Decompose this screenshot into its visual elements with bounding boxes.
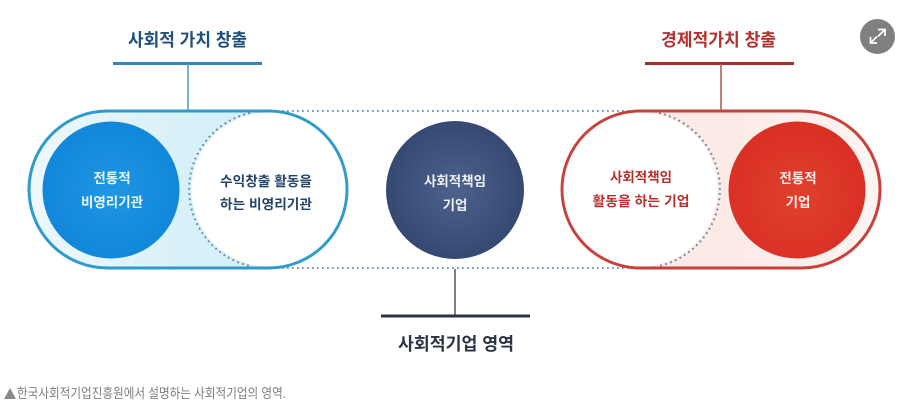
circle: traditional nonprofit — [42, 122, 180, 258]
label: traditional nonprofit: 비영리기관 — [81, 195, 144, 210]
dotted arc, right overlap — [659, 113, 720, 266]
icon: expand button — [860, 19, 895, 54]
circle: traditional company — [728, 122, 866, 258]
white overlap circle, left — [192, 112, 346, 266]
label: socially responsible company: 사회적책임 — [424, 174, 486, 189]
bracket: economic value — [645, 64, 794, 110]
label: traditional nonprofit: 전통적 — [93, 171, 131, 186]
bracket: social enterprise area — [381, 269, 530, 316]
bracket: social value — [113, 64, 262, 110]
label: traditional company: 기업 — [786, 195, 810, 210]
label: company with social responsibility activities: 사회적책임 — [610, 170, 672, 185]
heading: social enterprise area: 사회적기업 영역 — [398, 334, 514, 354]
label: socially responsible company: 기업 — [443, 198, 467, 213]
dotted connector lines of the social enterprise area — [272, 111, 640, 268]
label: revenue-generating nonprofit: 하는 비영리기관 — [220, 197, 313, 212]
panel: economic value pill — [562, 111, 880, 268]
label: revenue-generating nonprofit: 수익창출 활동을 — [220, 174, 312, 189]
panel: social value pill — [29, 111, 347, 268]
heading: economic value creation: 경제적가치 창출 — [661, 30, 776, 50]
icon: caption triangle — [4, 388, 16, 399]
circle: socially responsible company — [386, 121, 524, 259]
label: traditional company: 전통적 — [779, 171, 817, 186]
heading: social value creation: 사회적 가치 창출 — [128, 30, 247, 50]
caption: 한국사회적기업진흥원에서 설명하는 사회적기업의 영역. — [17, 386, 286, 401]
label: company with social responsibility activities: 활동을 하는 기업 — [592, 194, 690, 209]
white overlap circle, right — [564, 112, 718, 266]
dotted arc, left overlap — [189, 113, 250, 266]
